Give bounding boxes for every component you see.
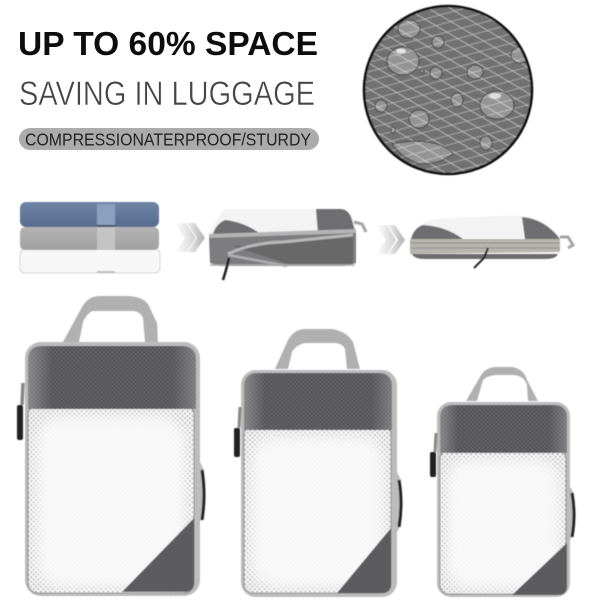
side clip bbox=[397, 472, 401, 532]
zipper pull bbox=[430, 433, 436, 477]
side clip bbox=[570, 487, 574, 540]
dark top panel bbox=[28, 346, 196, 409]
subtitle: SAVING IN LUGGAGE bbox=[19, 75, 315, 113]
folded towels stack bbox=[20, 202, 160, 273]
body bbox=[25, 342, 200, 596]
mesh window bbox=[440, 450, 566, 594]
handle bbox=[275, 329, 360, 369]
medium packing cube bbox=[234, 329, 401, 597]
arrow chevrons 2 bbox=[376, 225, 405, 254]
seam band bbox=[209, 231, 356, 236]
top face bbox=[209, 209, 356, 235]
white towel bbox=[20, 249, 160, 273]
feature pill: COMPRESSIONATERPROOF/STURDY bbox=[25, 130, 311, 150]
side handle bbox=[560, 237, 573, 248]
zipper straps bbox=[228, 235, 353, 254]
dark top panel bbox=[244, 373, 392, 430]
arrow chevrons 1 bbox=[175, 223, 205, 252]
body bbox=[437, 402, 570, 597]
zipper pull bbox=[234, 407, 240, 457]
side clip bbox=[200, 462, 204, 522]
gray towel bbox=[20, 227, 159, 250]
side handle bbox=[354, 222, 366, 232]
mesh window bbox=[244, 426, 391, 593]
zipper pull bbox=[17, 383, 23, 440]
waterproof fabric circle bbox=[364, 6, 532, 174]
corner patch bbox=[337, 528, 391, 593]
lower side bbox=[209, 231, 356, 266]
dark top panel bbox=[440, 405, 567, 453]
zipper pull bbox=[223, 258, 229, 280]
mesh window bbox=[28, 405, 194, 593]
handle bbox=[466, 367, 538, 401]
corner patch bbox=[512, 543, 567, 595]
expanded packing cube bbox=[209, 209, 366, 280]
zipper pull bbox=[474, 248, 488, 268]
corner patch bbox=[122, 518, 194, 592]
blue towel bbox=[20, 202, 159, 227]
body bbox=[241, 370, 397, 597]
handle bbox=[63, 296, 158, 342]
compressed packing cube bbox=[410, 216, 573, 268]
small packing cube bbox=[430, 367, 574, 597]
title: UP TO 60% SPACE bbox=[18, 25, 318, 62]
water droplets bbox=[375, 20, 529, 164]
large packing cube bbox=[17, 296, 204, 596]
